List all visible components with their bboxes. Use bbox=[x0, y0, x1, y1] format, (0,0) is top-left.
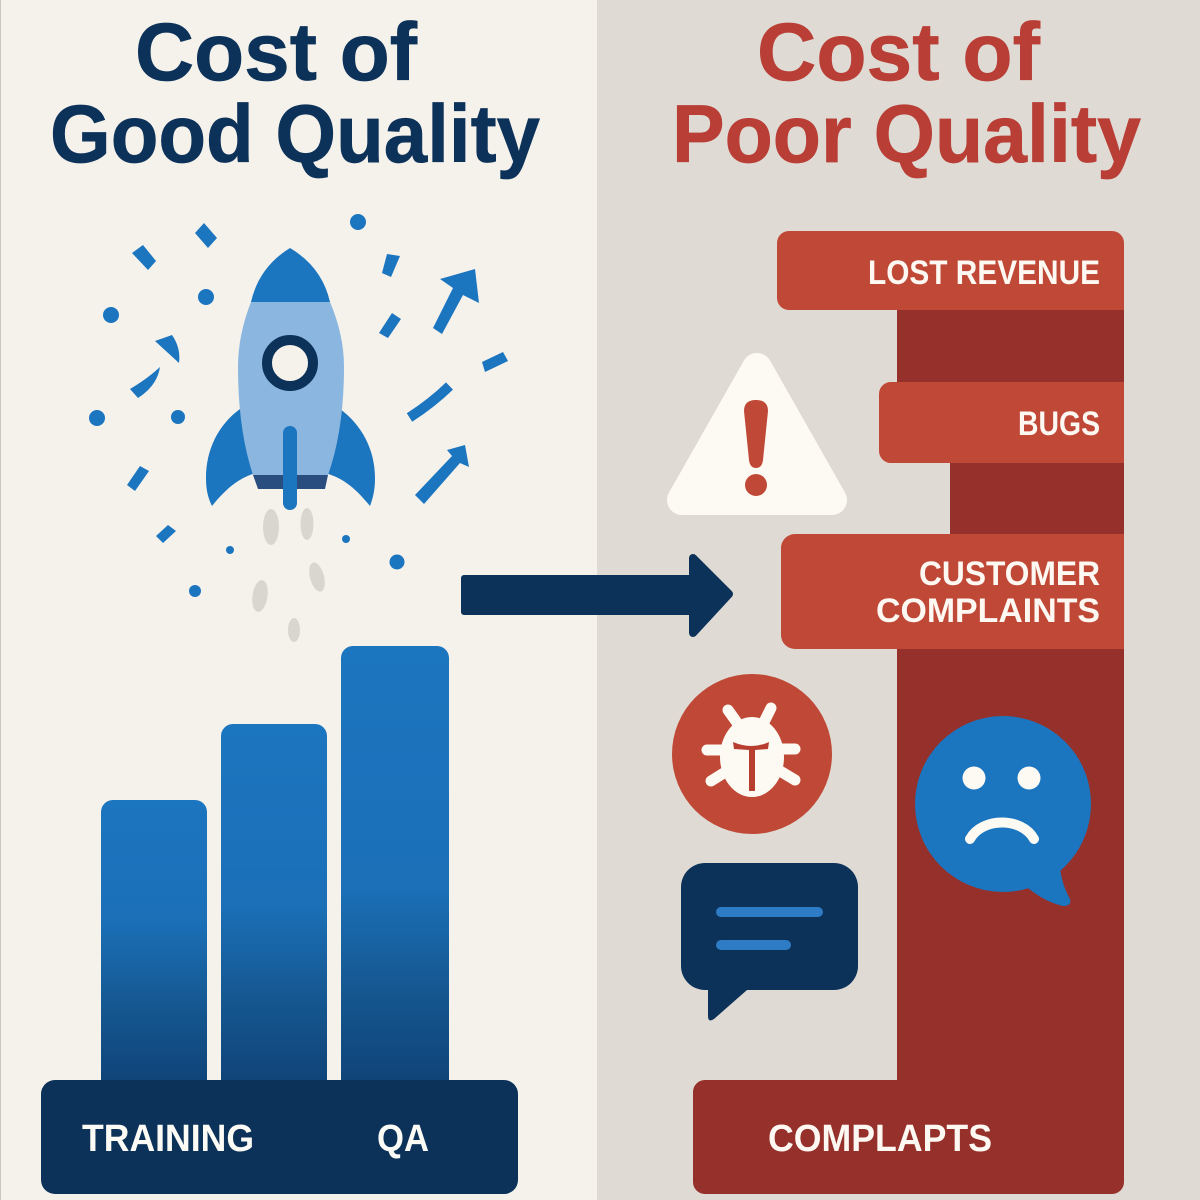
icon: upward arrow small bbox=[415, 445, 469, 504]
label: bugs: BUGS bbox=[1018, 405, 1100, 443]
label: customer complaints bbox=[876, 555, 1100, 630]
bar chart: rising quality investment bbox=[101, 646, 449, 1082]
icon: sad face speech bubble bbox=[915, 716, 1091, 906]
label: customer complaints: CUSTOMER bbox=[919, 555, 1100, 593]
icon: bug in red circle bbox=[672, 674, 832, 834]
panel: lost revenue bbox=[777, 231, 1124, 310]
label: qa: QA bbox=[377, 1118, 429, 1160]
label: customer complaints: COMPLAINTS bbox=[876, 592, 1100, 630]
label: lost revenue: LOST REVENUE bbox=[868, 254, 1100, 292]
icon: chat bubble bbox=[681, 863, 858, 1020]
title: cost of good quality: Cost of bbox=[135, 7, 418, 98]
panel: cost of good quality background bbox=[0, 0, 597, 1200]
label: training: TRAINING bbox=[82, 1118, 254, 1160]
title: cost of poor quality: Poor Quality bbox=[672, 89, 1141, 180]
panel: cost column bbox=[693, 300, 1124, 1194]
title: cost of good quality bbox=[50, 7, 540, 180]
title: cost of poor quality: Cost of bbox=[757, 7, 1041, 98]
title: cost of good quality: Good Quality bbox=[50, 89, 540, 180]
icon: rocket bbox=[206, 248, 375, 510]
panel: bugs bbox=[879, 382, 1124, 463]
panel: training and qa base bbox=[41, 1080, 518, 1194]
icon: warning triangle bbox=[682, 368, 832, 500]
label: complaints base: COMPLAPTS bbox=[768, 1118, 992, 1160]
icon: rocket exhaust smoke bbox=[250, 508, 328, 642]
panel: customer complaints bbox=[781, 534, 1124, 649]
arrow: good to poor quality bbox=[461, 558, 729, 633]
icon: confetti dots and pieces bbox=[89, 214, 508, 597]
title: cost of poor quality bbox=[672, 7, 1141, 180]
icon: upward arrow large bbox=[433, 269, 479, 334]
panel: cost of poor quality background bbox=[597, 0, 1200, 1200]
